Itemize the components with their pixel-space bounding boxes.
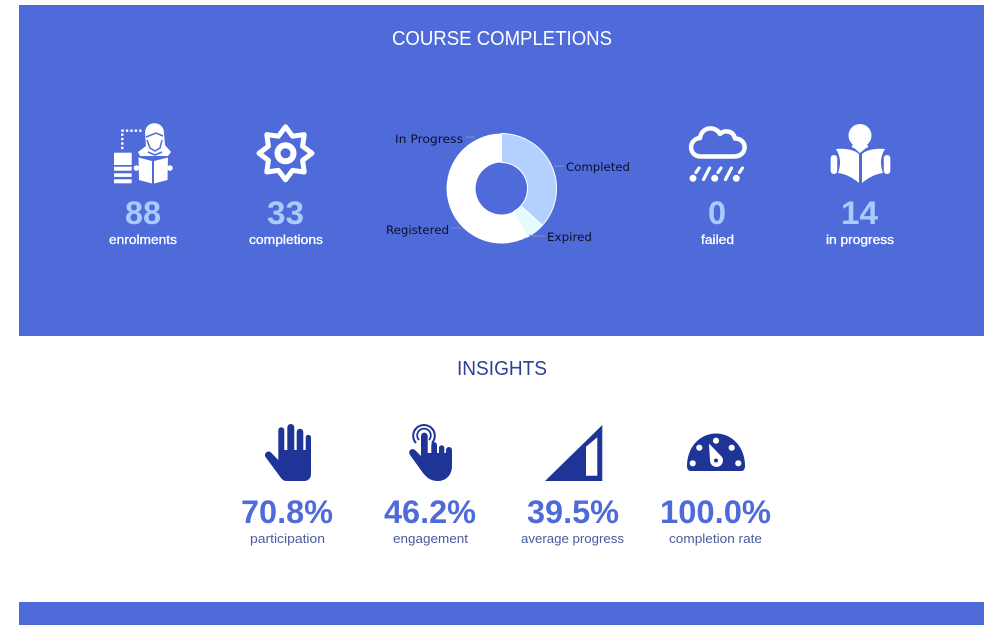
label: completions: completions — [249, 233, 323, 247]
icon: person reading with course list — [114, 123, 173, 184]
value: 100.0%: 100.0% — [660, 494, 771, 530]
icon: progress wedge — [545, 425, 602, 481]
stat: average progress — [521, 425, 624, 546]
stat: participation — [241, 424, 333, 546]
label: registered: Registered — [386, 223, 449, 237]
label: completion rate: completion rate — [669, 532, 762, 546]
title: course completions: COURSE COMPLETIONS — [392, 28, 612, 50]
stat: engagement — [384, 425, 476, 546]
value: 14: 14 — [841, 195, 878, 231]
icon: raised hand — [265, 424, 311, 481]
value: 0: 0 — [708, 195, 726, 231]
label: in progress: In Progress — [395, 132, 463, 146]
icon: tapping finger — [409, 425, 452, 481]
icon: rain cloud — [690, 128, 745, 182]
icon: speedometer — [687, 434, 745, 471]
label: participation: participation — [250, 532, 325, 546]
value: 39.5%: 39.5% — [527, 494, 619, 530]
panel: course completions — [19, 5, 984, 336]
value: 70.8%: 70.8% — [241, 494, 333, 530]
slice: completed — [502, 133, 557, 225]
leader lines — [451, 137, 564, 236]
stat: completions — [249, 127, 323, 247]
stat: failed — [690, 128, 745, 247]
value: 88: 88 — [125, 195, 161, 231]
label: in progress: in progress — [826, 233, 894, 247]
value: 46.2%: 46.2% — [384, 494, 476, 530]
stat: completion rate — [660, 434, 771, 546]
donut chart: course status — [386, 132, 630, 244]
panel: bottom band — [19, 602, 984, 625]
label: enrolments: enrolments — [109, 233, 177, 247]
icon: reader with open book — [831, 124, 890, 183]
label: expired: Expired — [547, 230, 592, 244]
label: average progress: average progress — [521, 532, 624, 546]
slice: registered — [447, 134, 527, 243]
value: 33: 33 — [267, 195, 304, 231]
icon: gear badge — [259, 127, 312, 180]
stat: in progress — [826, 124, 894, 247]
label: engagement: engagement — [393, 532, 469, 546]
label: failed: failed — [701, 233, 734, 247]
slice: expired — [514, 206, 542, 237]
label: completed: Completed — [566, 160, 630, 174]
stat: enrolments — [109, 123, 177, 247]
heading: insights: INSIGHTS — [457, 358, 547, 380]
